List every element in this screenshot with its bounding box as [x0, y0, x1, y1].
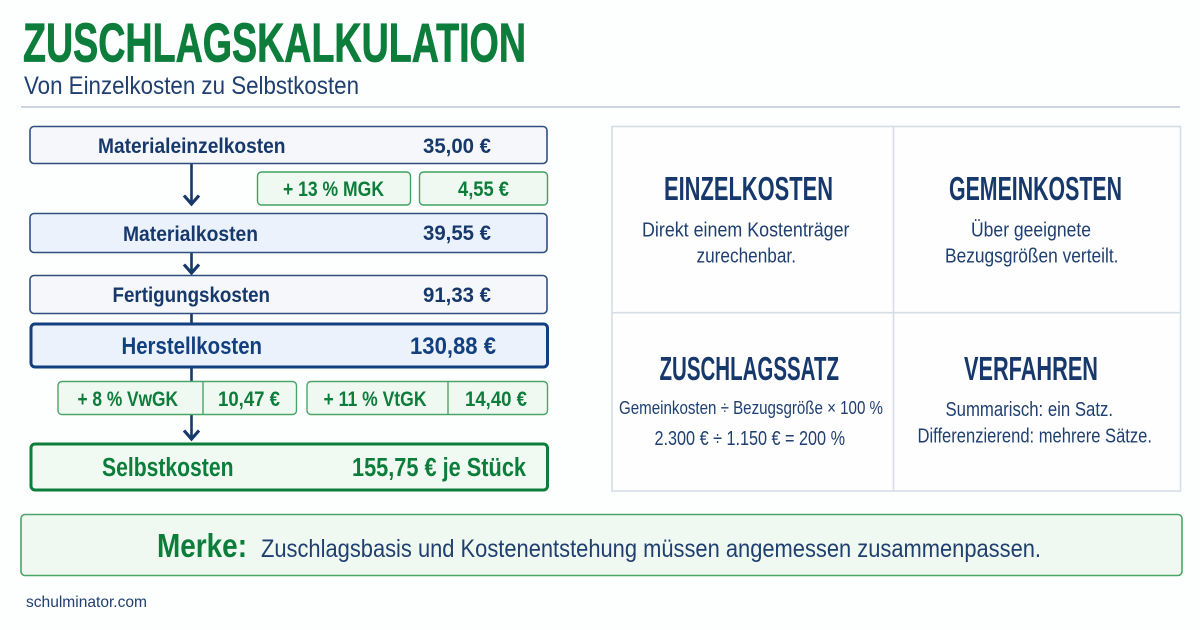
cell: Einzelkosten [642, 170, 850, 268]
cell: Verfahren: Differenzierend: mehrere Sätze. [918, 426, 1152, 448]
box: Materialeinzelkosten: Materialeinzelkosten [98, 134, 286, 158]
box: Selbstkosten [31, 444, 548, 490]
cell: Zuschlagssatz: Gemeinkosten ÷ Bezugsgröße × 100 % [619, 398, 883, 418]
footer: source: schulminator.com [26, 594, 147, 611]
connector and arrow: Fertigungskosten to Selbstkosten [184, 313, 199, 439]
box: Selbstkosten: Selbstkosten [102, 454, 234, 482]
chip: VwGK [58, 382, 296, 414]
chip: VwGK: 10,47 € [218, 388, 280, 411]
box: Fertigungskosten: 91,33 € [423, 283, 491, 307]
cell: Einzelkosten: Direkt einem Kostenträger [642, 220, 850, 242]
subtitle: Von Einzelkosten zu Selbstkosten [24, 72, 359, 100]
chip: VtGK: + 11 % VtGK [324, 388, 426, 411]
cell: Gemeinkosten: Über geeignete [971, 220, 1091, 242]
box: Materialkosten: 39,55 € [423, 221, 491, 245]
box: Herstellkosten: Herstellkosten [122, 333, 262, 360]
callout: Merke: Merke: [157, 527, 247, 564]
chip: 13 % MGK [258, 172, 410, 205]
box: Materialeinzelkosten: 35,00 € [423, 134, 491, 158]
title: ZUSCHLAGSKALKULATION [23, 12, 526, 74]
box: Fertigungskosten [30, 276, 547, 314]
box: Materialkosten [30, 214, 547, 252]
cell: Verfahren [918, 350, 1152, 448]
header [21, 12, 1180, 108]
cell: Verfahren: Summarisch: ein Satz. [946, 399, 1113, 421]
arrow: Materialeinzelkosten to Materialkosten [184, 163, 199, 204]
cell: Verfahren: VERFAHREN [964, 350, 1098, 387]
chip: 4,55 €: 4,55 € [458, 178, 509, 201]
box: Herstellkosten: 130,88 € [410, 333, 496, 360]
cell: Einzelkosten: EINZELKOSTEN [664, 170, 833, 207]
box: Fertigungskosten: Fertigungskosten [112, 283, 270, 307]
chip: VtGK [307, 382, 548, 414]
box: Selbstkosten: 155,75 € je Stück [352, 454, 527, 482]
chip: VwGK: + 8 % VwGK [78, 388, 178, 411]
cell: Einzelkosten: zurechenbar. [696, 246, 796, 268]
box: Materialkosten: Materialkosten [123, 222, 258, 246]
box: Materialeinzelkosten [30, 126, 547, 164]
callout: Merke [21, 514, 1182, 576]
chip: 4,55 € [420, 172, 548, 205]
cell: Zuschlagssatz: 2.300 € ÷ 1.150 € = 200 % [654, 428, 845, 450]
cell: Gemeinkosten: Bezugsgrößen verteilt. [945, 246, 1118, 268]
callout: Merke: Zuschlagsbasis und Kostenentstehung müssen angemessen zusammenpassen. [261, 535, 1041, 563]
chip: 13 % MGK: + 13 % MGK [283, 178, 384, 201]
flow chart: calculation scheme [30, 126, 548, 490]
cell: Zuschlagssatz: ZUSCHLAGSSATZ [660, 350, 839, 387]
cell: Gemeinkosten [945, 170, 1122, 268]
panel: definitions grid [612, 126, 1180, 491]
chip: VtGK: 14,40 € [465, 388, 527, 411]
arrow: Materialkosten to Fertigungskosten [184, 253, 199, 274]
box: Herstellkosten [31, 324, 548, 367]
cell: Zuschlagssatz [619, 350, 883, 450]
